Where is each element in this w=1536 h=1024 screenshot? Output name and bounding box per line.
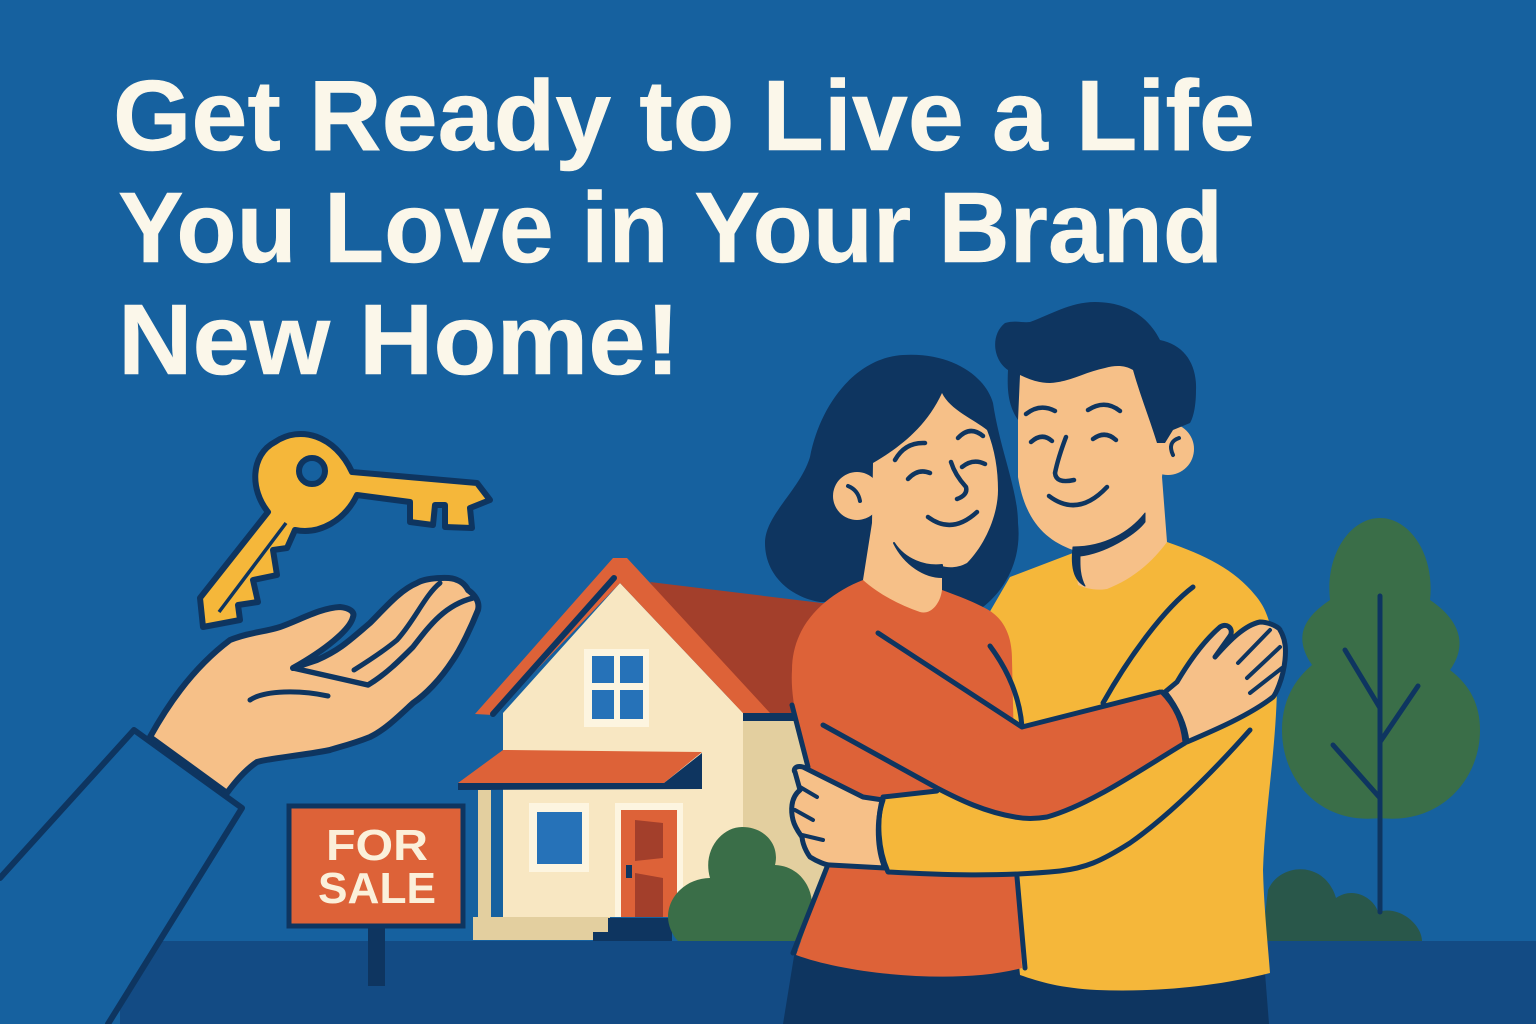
- tree crown: [1282, 518, 1480, 819]
- foundation and steps: [473, 917, 610, 940]
- man's ear: [1142, 423, 1194, 475]
- house front wall: [503, 583, 743, 917]
- for sale sign: SALE: [318, 864, 436, 913]
- jaw shadow: [1072, 513, 1145, 586]
- for sale sign: [289, 806, 463, 986]
- lower window: [529, 803, 589, 872]
- roof inner shadow: [493, 578, 614, 714]
- title: Get Ready to Live a Life: [113, 60, 1255, 172]
- hand on shoulder: [1165, 622, 1285, 742]
- icon: giving hand: [0, 578, 478, 1024]
- house front roof edge: [475, 558, 770, 715]
- shrub: [1262, 869, 1422, 941]
- finger lines: [795, 630, 1282, 840]
- man's sweater: [985, 542, 1277, 990]
- trousers: [783, 950, 1269, 1024]
- palm and fingers: [150, 578, 478, 793]
- woman's face features: [895, 431, 985, 525]
- arm and body lines: [792, 587, 1250, 968]
- bush by house: [668, 827, 812, 941]
- sleeve: [0, 730, 242, 1024]
- title: New Home!: [118, 284, 680, 396]
- house side wall: [743, 720, 830, 905]
- woman's arm fill: [900, 692, 1185, 818]
- hand on waist: [792, 767, 885, 868]
- door: [615, 803, 683, 917]
- porch post: [478, 790, 491, 917]
- title: You Love in Your Brand: [118, 172, 1223, 284]
- icon: key: [200, 434, 490, 627]
- woman's hair: [765, 355, 1019, 607]
- chin shadow: [894, 543, 942, 577]
- man's arm: [879, 730, 1250, 875]
- woman's sweater: [792, 580, 1022, 977]
- man's face and neck: [1018, 360, 1167, 590]
- house back roof: [650, 582, 830, 713]
- tree and shrubs: [1262, 518, 1480, 941]
- house: [458, 558, 830, 941]
- window: [584, 649, 649, 727]
- tree trunk: [1333, 596, 1418, 912]
- couple: [765, 302, 1285, 1024]
- house eave shadow: [743, 713, 798, 721]
- man's hair: [995, 302, 1196, 443]
- woman's ear: [833, 472, 881, 520]
- man's face features: [1026, 405, 1120, 505]
- porch awning: [458, 750, 702, 790]
- for sale sign: FOR: [326, 821, 428, 870]
- title: [113, 60, 1255, 396]
- woman's face and neck: [863, 393, 998, 613]
- sleeve outline: [0, 730, 242, 1024]
